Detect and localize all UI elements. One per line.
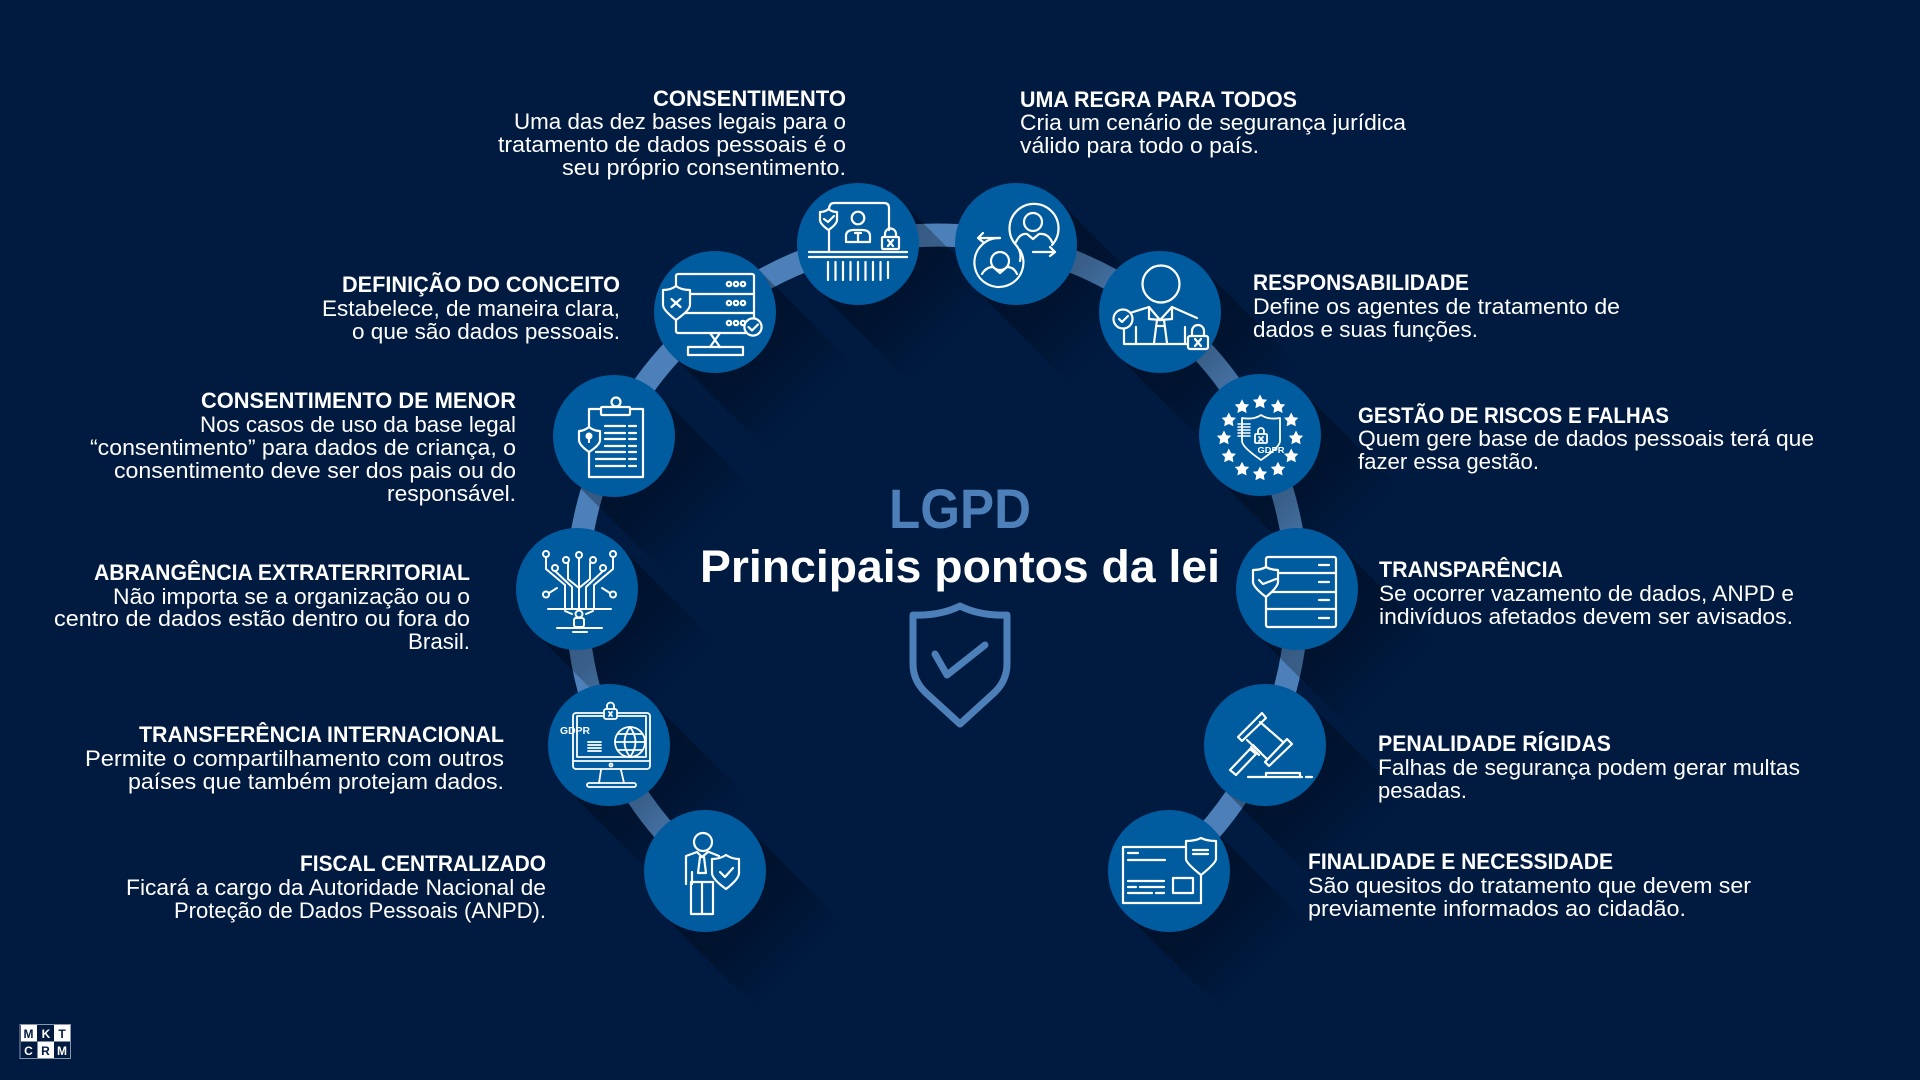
text: uma regra para todos: válido para todo o país. <box>1020 133 1259 158</box>
long shadows of the circles <box>534 201 1438 1012</box>
text: penalidade rígidas: Falhas de segurança podem gerar multas <box>1378 755 1800 780</box>
text: consentimento de menor: “consentimento” para dados de criança, o <box>90 435 516 460</box>
text: consentimento: Uma das dez bases legais para o <box>514 109 846 134</box>
text: consentimento: seu próprio consentimento. <box>562 155 846 180</box>
logo: MKT CRM <box>20 1024 70 1058</box>
icon: transferência internacional: GDPR <box>560 726 591 737</box>
text: definição do conceito: DEFINIÇÃO DO CONCEITO <box>342 272 620 297</box>
text: penalidade rígidas <box>1378 731 1800 803</box>
logo: MKT CRM: M <box>24 1027 34 1041</box>
icon: definição do conceito <box>654 251 776 373</box>
text: abrangência extraterritorial: Brasil. <box>408 629 470 654</box>
text: finalidade e necessidade: FINALIDADE E NECESSIDADE <box>1308 849 1613 874</box>
icon: penalidade rígidas <box>1204 684 1326 806</box>
icon: transparência <box>1236 528 1358 650</box>
text: gestão de riscos e falhas: GESTÃO DE RISCOS E FALHAS <box>1358 403 1669 428</box>
logo: MKT CRM: R <box>41 1044 50 1058</box>
text: consentimento de menor: responsável. <box>387 481 516 506</box>
text: consentimento: tratamento de dados pessoais é o <box>498 132 846 157</box>
text: uma regra para todos <box>1020 87 1406 158</box>
text: finalidade e necessidade: São quesitos do tratamento que devem ser <box>1308 873 1752 898</box>
icon: consentimento <box>797 183 919 305</box>
text: transferência internacional: TRANSFERÊNCIA INTERNACIONAL <box>139 722 504 747</box>
text: transparência: indivíduos afetados devem ser avisados. <box>1379 604 1793 629</box>
text: definição do conceito <box>322 272 620 344</box>
text: abrangência extraterritorial: Não importa se a organização ou o <box>113 584 470 609</box>
logo: MKT CRM: C <box>24 1044 33 1058</box>
text: responsabilidade <box>1253 270 1620 342</box>
text: consentimento: CONSENTIMENTO <box>653 86 846 111</box>
text: transparência <box>1379 557 1794 629</box>
logo: MKT CRM: M <box>57 1044 67 1058</box>
icon: finalidade e necessidade <box>1108 810 1230 932</box>
text: definição do conceito: Estabelece, de maneira clara, <box>322 296 620 321</box>
text: consentimento <box>498 86 846 180</box>
icon: responsabilidade <box>1099 251 1221 373</box>
text: transferência internacional: países que também protejam dados. <box>128 769 504 794</box>
text: responsabilidade: dados e suas funções. <box>1253 317 1478 342</box>
icon: fiscal centralizado <box>644 810 766 932</box>
text: transparência: Se ocorrer vazamento de dados, ANPD e <box>1379 581 1794 606</box>
title block <box>700 477 1220 592</box>
text: gestão de riscos e falhas <box>1358 403 1814 474</box>
text: abrangência extraterritorial: centro de dados estão dentro ou fora do <box>54 606 470 631</box>
text: penalidade rígidas: PENALIDADE RÍGIDAS <box>1378 731 1611 756</box>
text: gestão de riscos e falhas: Quem gere base de dados pessoais terá que <box>1358 426 1814 451</box>
text: abrangência extraterritorial <box>54 560 470 654</box>
icon: transferência internacional <box>548 684 670 806</box>
title: LGPD: LGPD <box>889 477 1031 540</box>
icon: uma regra para todos <box>955 183 1077 305</box>
icon: central shield with check <box>913 606 1007 724</box>
text: penalidade rígidas: pesadas. <box>1378 778 1467 803</box>
text: abrangência extraterritorial: ABRANGÊNCIA EXTRATERRITORIAL <box>94 560 470 585</box>
text: gestão de riscos e falhas: fazer essa gestão. <box>1358 449 1539 474</box>
text: transferência internacional <box>85 722 504 794</box>
text: consentimento de menor: Nos casos de uso da base legal <box>200 412 516 437</box>
title: Principais pontos da lei: Principais pontos da lei <box>700 541 1220 592</box>
logo: MKT CRM: K <box>42 1027 51 1041</box>
text: responsabilidade: Define os agentes de tratamento de <box>1253 294 1620 319</box>
text: fiscal centralizado: FISCAL CENTRALIZADO <box>300 851 546 876</box>
text: responsabilidade: RESPONSABILIDADE <box>1253 270 1469 295</box>
icon: gestão de riscos e falhas: GDPR <box>1258 445 1284 455</box>
text: transferência internacional: Permite o compartilhamento com outros <box>85 746 504 771</box>
text: consentimento de menor: consentimento deve ser dos pais ou do <box>114 458 516 483</box>
icon: abrangência extraterritorial <box>516 528 638 650</box>
text: fiscal centralizado <box>126 851 546 923</box>
text: consentimento de menor <box>90 388 516 506</box>
logo: MKT CRM: T <box>58 1027 66 1041</box>
text: transparência: TRANSPARÊNCIA <box>1379 557 1563 582</box>
text: fiscal centralizado: Ficará a cargo da Autoridade Nacional de <box>126 875 546 900</box>
text: fiscal centralizado: Proteção de Dados Pessoais (ANPD). <box>174 898 546 923</box>
text: uma regra para todos: UMA REGRA PARA TODOS <box>1020 87 1297 112</box>
icon: consentimento de menor <box>553 375 675 497</box>
text: uma regra para todos: Cria um cenário de segurança jurídica <box>1020 110 1406 135</box>
text: finalidade e necessidade: previamente informados ao cidadão. <box>1308 896 1686 921</box>
text: definição do conceito: o que são dados pessoais. <box>352 319 620 344</box>
text: consentimento de menor: CONSENTIMENTO DE MENOR <box>201 388 516 413</box>
icon: gestão de riscos e falhas <box>1199 374 1321 496</box>
arc band connecting the circles <box>577 235 1297 871</box>
text: finalidade e necessidade <box>1308 849 1752 921</box>
